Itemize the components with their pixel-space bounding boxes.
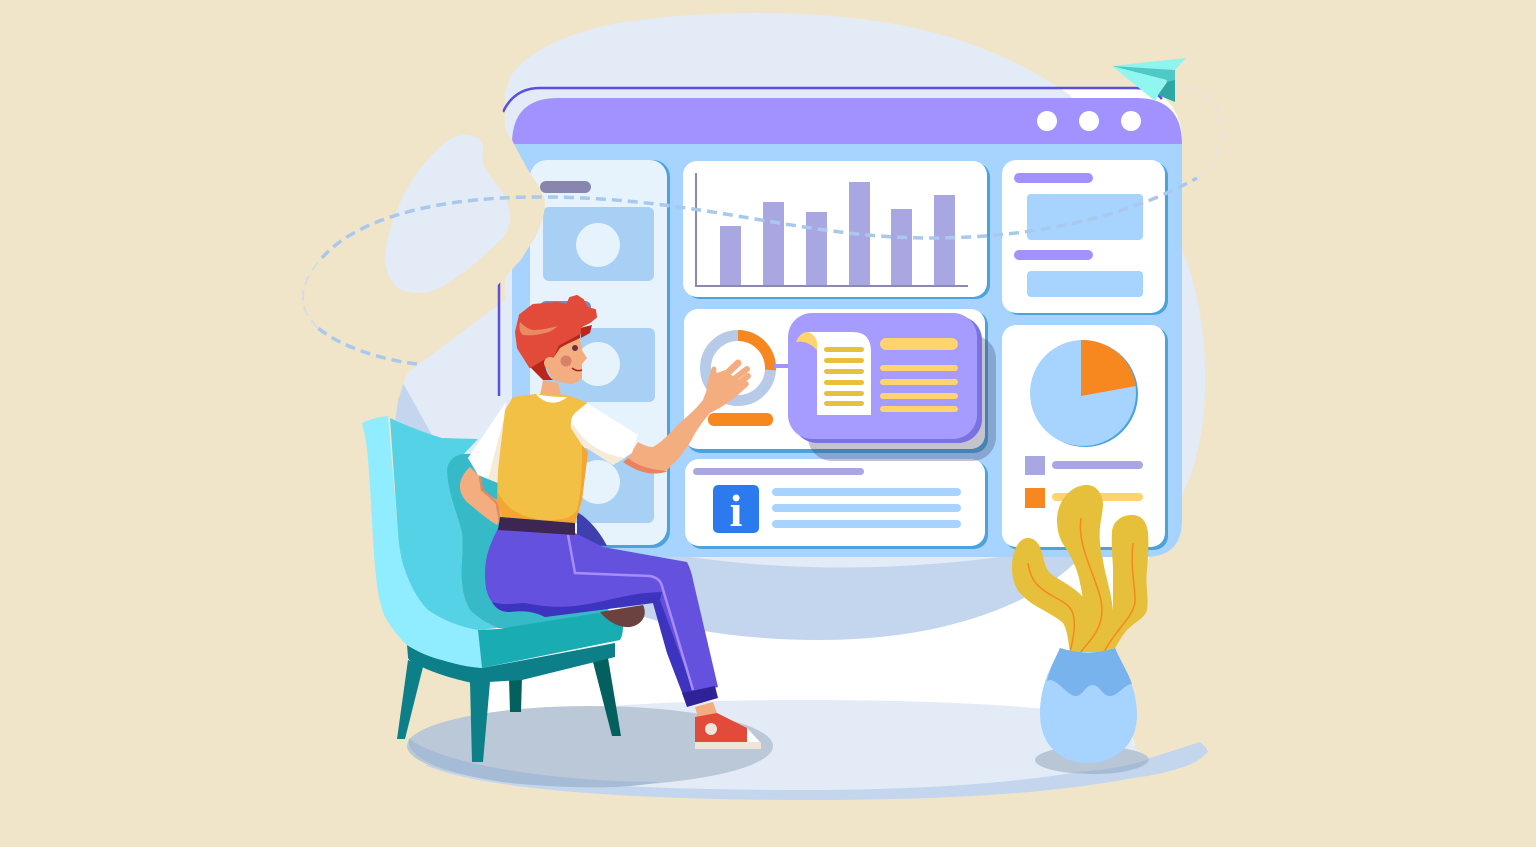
back leg right	[593, 658, 621, 736]
icon: paper plane	[1112, 58, 1186, 102]
popup card	[788, 313, 982, 443]
chair base	[407, 643, 615, 683]
window body	[512, 144, 1182, 557]
document lines	[824, 347, 864, 406]
front leg center	[470, 682, 490, 762]
panel: top right text blocks	[1002, 160, 1168, 315]
chair shadow	[407, 706, 773, 787]
window control dots	[1037, 111, 1141, 131]
eye	[572, 345, 578, 351]
left leaf	[1012, 538, 1084, 652]
chair outer shell	[362, 416, 482, 668]
panel: donut chart	[684, 309, 988, 453]
floor surface	[410, 700, 1146, 790]
window header	[512, 98, 1182, 144]
shadow blob below window	[610, 552, 1085, 640]
ear	[544, 357, 556, 369]
panel: bar chart	[683, 161, 990, 299]
ankle	[695, 702, 717, 717]
plant and vase	[1012, 485, 1149, 774]
chair cushion	[447, 453, 623, 628]
vest hem shading	[497, 445, 588, 523]
leaf veins	[1028, 518, 1135, 653]
pale blue background blob	[395, 13, 1205, 640]
neck	[540, 380, 562, 402]
collar	[536, 394, 567, 403]
back leg center	[509, 677, 522, 712]
hair	[516, 296, 596, 367]
legend	[1025, 456, 1045, 475]
left sleeve	[468, 402, 506, 483]
front leg left	[397, 660, 423, 739]
cheek	[560, 356, 572, 366]
hair forelock shadow	[580, 325, 592, 338]
white backdrop behind window and floor	[487, 88, 1182, 770]
card lines	[880, 338, 958, 412]
vase top glaze	[1047, 648, 1132, 696]
head	[516, 296, 596, 384]
dashed flight path	[303, 87, 1222, 364]
orange bar	[708, 413, 773, 426]
pants shading	[492, 592, 693, 695]
smile	[572, 368, 582, 371]
white wedge under blob	[500, 545, 690, 700]
pie	[1032, 341, 1138, 447]
shoe	[695, 713, 761, 749]
pale band under window	[690, 557, 1000, 568]
right leaf	[1103, 515, 1148, 652]
armchair	[362, 416, 623, 762]
text lines	[772, 488, 961, 528]
back hair	[530, 333, 580, 380]
connector	[774, 364, 792, 368]
bars	[720, 182, 955, 286]
belt	[498, 517, 575, 535]
page curl	[796, 332, 817, 350]
popup card shadow	[808, 335, 996, 461]
browser window	[512, 98, 1182, 557]
right sleeve	[571, 403, 638, 465]
vase body	[1040, 648, 1137, 763]
face	[545, 338, 587, 384]
vest	[497, 394, 588, 523]
left arm	[460, 467, 502, 525]
window outline	[499, 88, 1162, 396]
panel: info list	[685, 459, 988, 549]
document page	[806, 332, 871, 415]
pants stripe	[568, 535, 693, 690]
far foot	[600, 605, 645, 627]
vase shadow	[1035, 746, 1149, 774]
panel: pie chart	[1002, 325, 1168, 550]
donut	[706, 336, 770, 400]
chair seat front	[478, 613, 623, 668]
chair mid shell	[390, 418, 498, 630]
pants	[485, 528, 718, 695]
chart axes	[696, 173, 968, 286]
floor rim	[425, 742, 1208, 800]
floor	[410, 700, 1208, 800]
right arm	[623, 363, 748, 474]
person	[460, 296, 761, 749]
far leg	[577, 512, 607, 546]
hair highlight	[519, 322, 558, 335]
icon: info	[713, 485, 759, 536]
beige swoosh overlapping window	[300, 80, 545, 445]
pale blob island	[385, 135, 510, 293]
fingers	[709, 363, 748, 398]
darker blob wedge left of chair	[395, 383, 433, 437]
center leaf	[1057, 485, 1113, 652]
panel: left media list	[530, 160, 670, 548]
pants cuff	[682, 686, 718, 707]
icon: info: i	[730, 485, 743, 536]
